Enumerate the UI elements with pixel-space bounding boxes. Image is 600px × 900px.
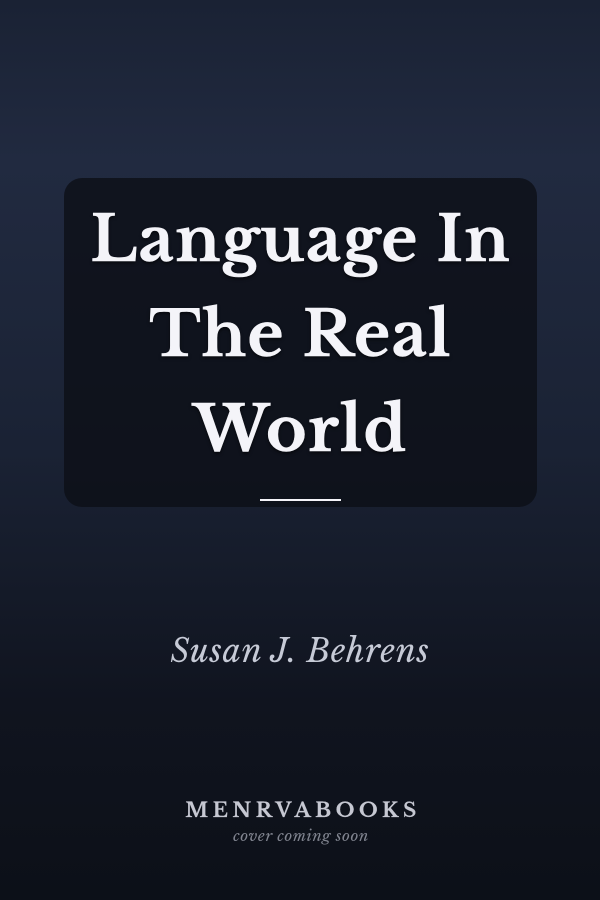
cover note: cover coming soon bbox=[233, 827, 369, 846]
author: Susan J. Behrens bbox=[170, 631, 430, 671]
title: World bbox=[193, 391, 408, 468]
title bbox=[90, 201, 511, 468]
title: The Real bbox=[149, 296, 452, 373]
title panel bbox=[64, 178, 537, 507]
title: Language In bbox=[90, 201, 511, 278]
publisher: MENRVABOOKS bbox=[185, 799, 421, 823]
title divider bbox=[260, 499, 341, 501]
